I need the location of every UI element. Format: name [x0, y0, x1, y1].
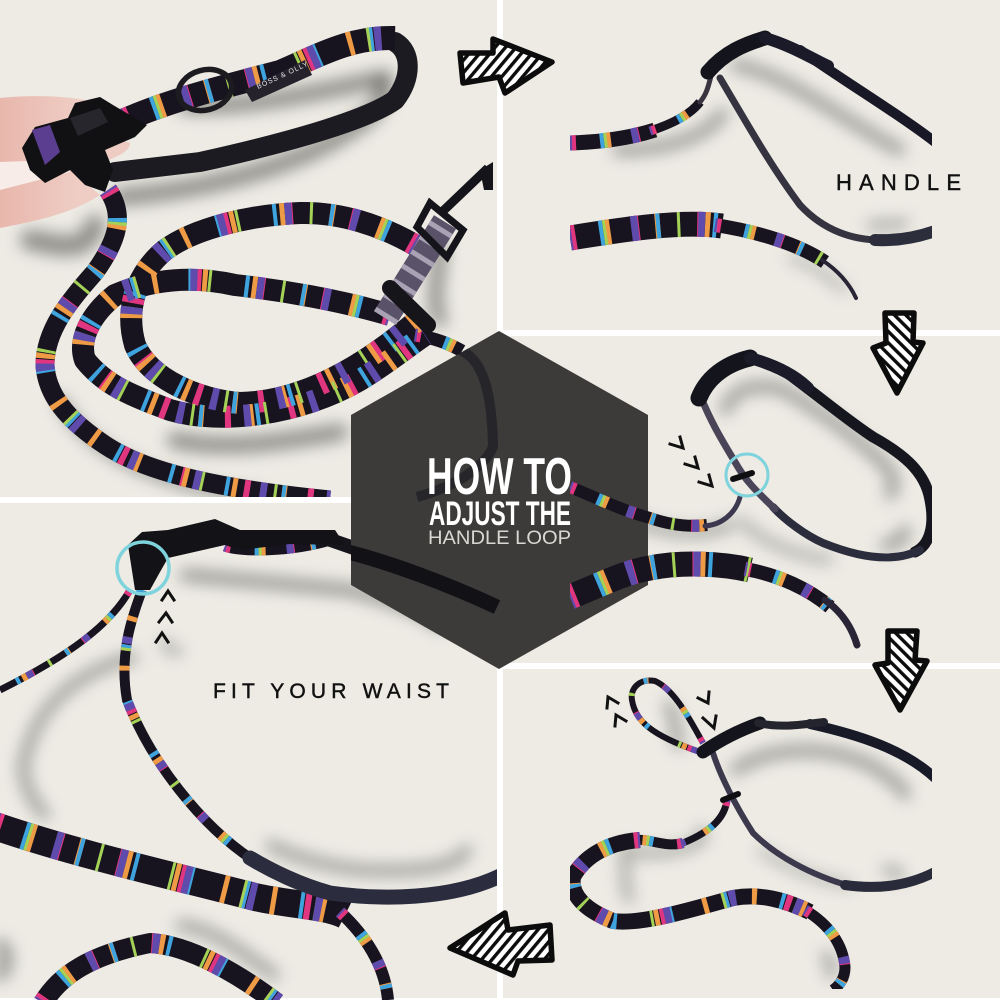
- shadows: [625, 705, 905, 975]
- padded handle, lower side: [250, 858, 500, 897]
- strap tail at buckle: [32, 125, 60, 165]
- lower handle strap: [720, 78, 880, 240]
- handle band: [800, 50, 935, 142]
- panel: step 1 leash held in hand: [0, 0, 497, 500]
- buckle: [703, 722, 824, 752]
- thin strap tails: [700, 76, 711, 102]
- gap between fingers: [0, 160, 70, 190]
- panel: step 2 handle: [503, 0, 1000, 330]
- patterned straps seen through hexagon: [570, 487, 830, 607]
- direction chevrons: [156, 591, 174, 642]
- shadows: [590, 387, 905, 560]
- D-ring: [176, 66, 233, 114]
- patterned straps: [45, 38, 462, 500]
- padded handle, upper side: [325, 538, 497, 607]
- patterned strap ends: [570, 102, 825, 262]
- buckle side view: [708, 38, 828, 72]
- text: HANDLE caption: HANDLE: [836, 170, 961, 195]
- padded handle seen through hexagon: [340, 550, 497, 607]
- title: HOW TO: HOW TO: [427, 448, 572, 506]
- patterned straps: [573, 681, 845, 990]
- highlight circle: [726, 454, 768, 496]
- pale strap between slider and hook: [385, 222, 445, 318]
- buckle: [128, 519, 345, 590]
- direction chevrons: [670, 437, 712, 486]
- lower handle strap: [713, 753, 850, 886]
- central hexagon title badge: [340, 331, 830, 669]
- brand label on strap: BOSS & OLLY: [256, 61, 310, 91]
- patterned straps: [0, 540, 388, 1000]
- shadows: [617, 65, 905, 290]
- lower handle strap: [773, 507, 920, 557]
- stopper: [723, 794, 738, 800]
- hand holding the buckle: [0, 96, 130, 228]
- arrow: step 3 to step 4: [875, 631, 927, 710]
- black padded handle: [115, 42, 408, 172]
- stopper: [733, 473, 752, 479]
- direction chevrons: [607, 692, 716, 728]
- title: ADJUST THE: ADJUST THE: [429, 495, 571, 533]
- handle band: [790, 375, 932, 552]
- subtitle: HANDLE LOOP: HANDLE LOOP: [428, 528, 571, 549]
- buckle: [699, 358, 808, 398]
- arrow: step 1 to step 2: [460, 39, 552, 93]
- shadows: [0, 575, 467, 975]
- brand label on strap: [245, 60, 312, 102]
- buckle: [22, 97, 147, 192]
- slider: [390, 288, 428, 325]
- snap hook: [417, 162, 493, 257]
- soft shadows under the leash: [30, 78, 440, 497]
- strap tails: [825, 600, 857, 645]
- patterned straps: [648, 511, 834, 612]
- handle band: [810, 724, 935, 778]
- text: FIT YOUR WAIST caption: FIT YOUR WAIST: [213, 680, 449, 703]
- arrow: step 2 to step 3: [873, 313, 923, 393]
- highlight circle: [117, 542, 169, 594]
- panel: step 5 fit your waist: [0, 503, 500, 1000]
- panel: step 4 pull the loop: [503, 669, 1000, 998]
- panel: step 3 slide the stopper: [503, 336, 1000, 663]
- strap seen through hexagon, upper: [417, 350, 493, 497]
- arrow: step 4 to step 5: [450, 913, 552, 975]
